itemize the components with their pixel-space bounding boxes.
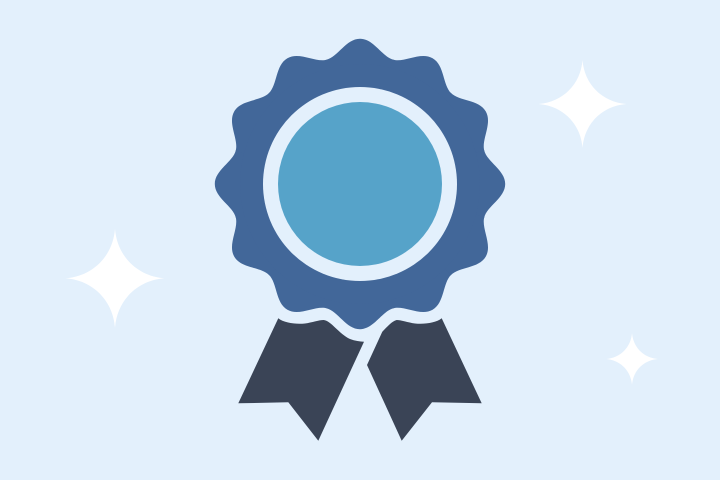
sparkle: top right <box>538 60 626 148</box>
rosette: light ring <box>263 87 457 281</box>
rosette: scalloped badge <box>215 39 505 329</box>
ribbon: right tail <box>367 318 482 441</box>
rosette: centre disc <box>278 102 442 266</box>
ribbon: left tail <box>238 318 364 441</box>
sparkle: bottom right <box>606 333 658 385</box>
sparkle: left <box>66 229 164 328</box>
